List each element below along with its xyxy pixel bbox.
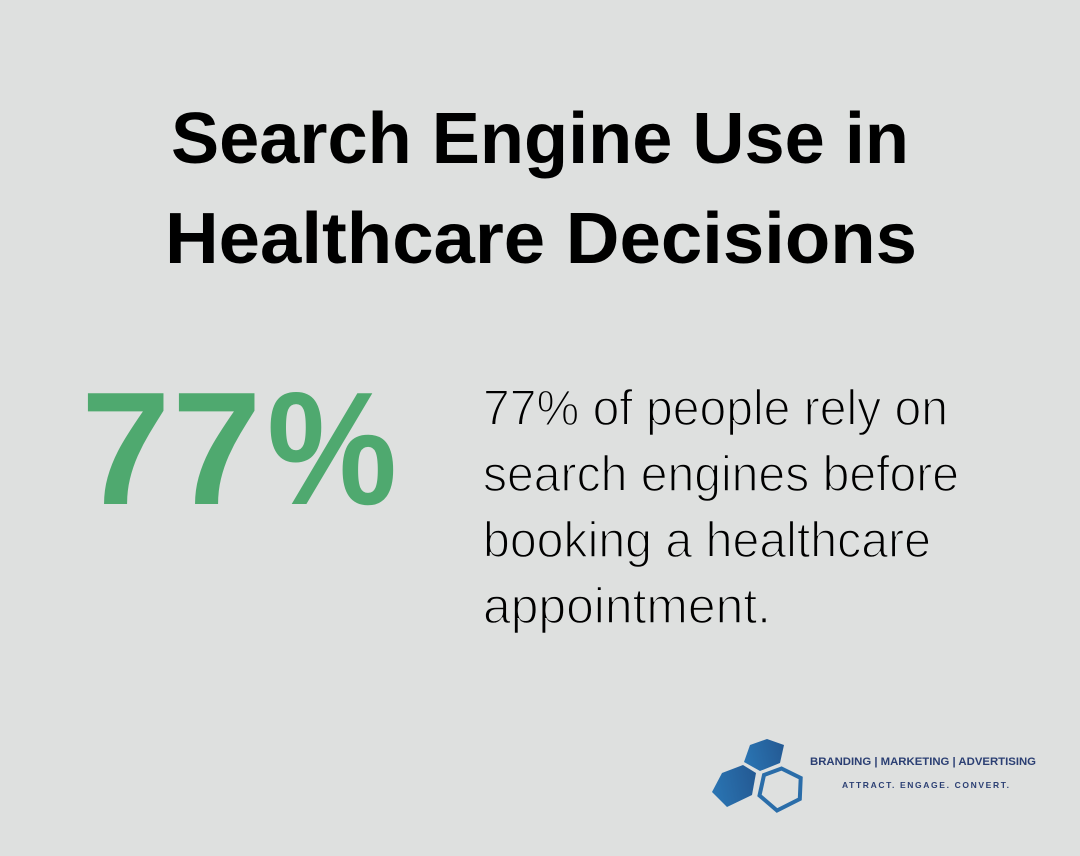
- title: Healthcare Decisions: [165, 199, 917, 279]
- big statistic: 77%: %: [267, 359, 397, 539]
- description text: search engines before: [483, 446, 959, 502]
- big statistic: 77%: 7: [172, 359, 262, 539]
- big statistic: 77%: [81, 359, 397, 539]
- logo tagline: attract engage convert: ATTRACT. ENGAGE. CONVERT.: [842, 780, 1009, 790]
- description text: booking a healthcare: [483, 512, 931, 568]
- logo: [712, 739, 1036, 810]
- title: Search Engine Use in: [171, 99, 909, 179]
- description text: [483, 380, 959, 634]
- icon: three hexagons: [712, 739, 801, 810]
- description text: appointment.: [483, 578, 771, 634]
- logo tagline: services: BRANDING | MARKETING | ADVERTISING: [810, 756, 1036, 768]
- description text: 77% of people rely on: [483, 380, 948, 436]
- big statistic: 77%: 7: [81, 359, 171, 539]
- title: [165, 99, 917, 279]
